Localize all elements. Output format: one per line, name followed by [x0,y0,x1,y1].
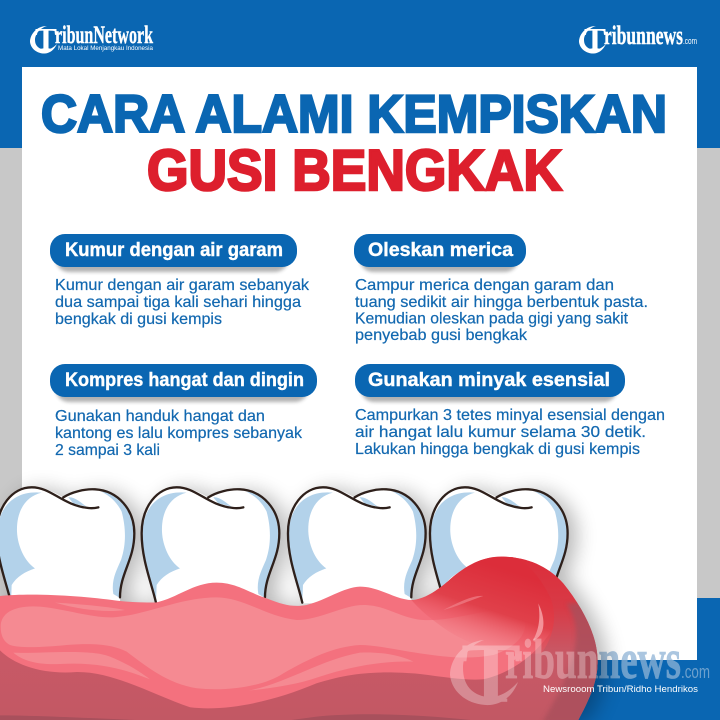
tip: Kompres hangat dan dingin: kantong es lalu kompres sebanyak [55,425,302,442]
logo: Tribunnews: ribunnews [604,21,683,50]
logo: Tribun Network: T [35,21,57,57]
tip: Gunakan minyak esensial: Lakukan hingga bengkak di gusi kempis [355,441,640,458]
logo: Tribun Network: Mata Lokal Menjangkau Indonesia [58,46,154,52]
logo: Tribunnews: .com [683,36,697,46]
tip: Gunakan minyak esensial: air hangat lalu kumur selama 30 detik. [355,424,646,441]
title [41,85,667,203]
darker swelling edge [543,602,598,720]
gum light centre [1,597,525,689]
credit: Newsrooom Tribun/Ridho Hendrikos [543,684,698,695]
swelling highlight [443,596,483,610]
tip: Kumur dengan air garam: Kumur dengan air garam [65,240,283,261]
tip: Kompres hangat dan dingin [50,364,317,459]
tip: Oleskan merica: Oleskan merica [368,240,513,261]
illustration: teeth and swollen gum [0,487,613,720]
tip: Gunakan minyak esensial [355,364,665,458]
tip: Kompres hangat dan dingin: 2 sampai 3 kali [55,442,160,459]
gum base [0,553,613,720]
teeth and gum shadow [5,489,607,720]
red top of swelling [410,555,554,654]
logo: Tribunnews [579,21,697,57]
bottom dark [0,714,500,720]
title: GUSI BENGKAK [147,139,562,203]
logo: Tribunnews: T [584,21,606,57]
title: CARA ALAMI KEMPISKAN [41,85,667,144]
logo: Tribun Network: ribunNetwork [55,22,153,49]
tip: Oleskan merica: penyebab gusi bengkak [355,327,527,344]
tip: Kompres hangat dan dingin: Gunakan handuk hangat dan [55,408,265,425]
tip: Oleskan merica: tuang sedikit air hingga berbentuk pasta. [355,294,648,311]
watermark: news on panel: .com [681,662,710,682]
watermark: Tribun on gum [450,638,596,706]
tip: Kumur dengan air garam: bengkak di gusi kempis [55,311,222,328]
tip: Gunakan minyak esensial: Campurkan 3 tetes minyal esensial dengan [355,407,665,424]
tip: Oleskan merica: Kemudian oleskan pada gigi yang sakit [355,310,629,328]
gum highlights [13,603,413,691]
teeth [0,487,568,603]
tip: Kumur dengan air garam [50,234,309,328]
tip: Oleskan merica [354,234,648,344]
tip: Kumur dengan air garam: dua sampai tiga kali sehari hingga [55,294,301,311]
tip: Gunakan minyak esensial: Gunakan minyak esensial [368,370,610,391]
gum [0,553,613,720]
watermark: Tribun on gum: T [461,625,521,720]
tip: Kompres hangat dan dingin: Kompres hangat dan dingin [65,370,304,391]
tip: Oleskan merica: Campur merica dengan garam dan [355,277,614,294]
panel: white content card [22,67,697,660]
tip: Kumur dengan air garam: Kumur dengan air garam sebanyak [55,277,309,294]
logo: Tribun Network [30,21,154,57]
gum dark underside and swelling surround [0,555,613,720]
